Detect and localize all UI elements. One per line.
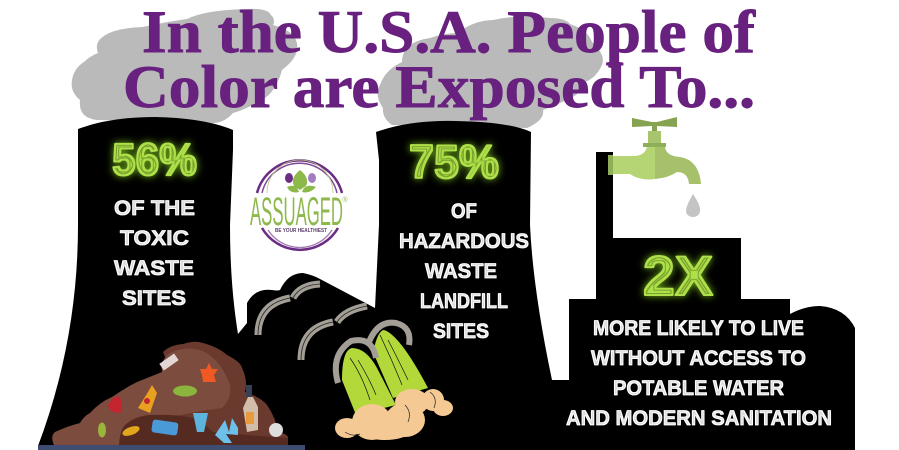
pipes: grey bands [258, 284, 367, 360]
text: of the toxic waste sites [114, 197, 195, 310]
waste pile [52, 342, 288, 445]
title: Color are Exposed To... [123, 54, 755, 120]
text: of the toxic waste sites: SITES [122, 287, 186, 310]
logo: Assuaged [250, 160, 348, 250]
stat: 2X: 2X [643, 244, 713, 307]
logo: Assuaged: BE YOUR HEALTHIEST [275, 228, 328, 234]
black industrial silhouette: towers, pipes and factory [38, 117, 855, 450]
icon: faucet and water drop [608, 117, 701, 217]
text: of the toxic waste sites: OF THE [114, 197, 195, 220]
text: of the toxic waste sites: WASTE [114, 257, 194, 280]
text: more likely to live without access: AND MODERN SANITATION [566, 407, 832, 430]
foam [335, 389, 453, 440]
stat: 75%: 75% [409, 135, 499, 188]
smoke cloud: middle tower [378, 16, 603, 128]
text: of hazardous waste landfill sites: HAZARDOUS [399, 230, 529, 253]
title: In the U.S.A. People of [142, 0, 756, 65]
pipes: outfall rings and green sludge [335, 323, 453, 440]
title [123, 0, 756, 120]
text: of the toxic waste sites: TOXIC [120, 227, 189, 250]
text: of hazardous waste landfill sites: WASTE [425, 260, 497, 283]
text: of hazardous waste landfill sites: SITES [433, 320, 489, 343]
text: more likely to live without access [566, 317, 832, 430]
smoke cloud: left tower [72, 9, 297, 123]
text: ASSUAGED [250, 190, 343, 234]
text: of hazardous waste landfill sites: OF [451, 200, 477, 223]
text: more likely to live without access: MORE LIKELY TO LIVE [593, 317, 804, 340]
text: more likely to live without access: WITHOUT ACCESS TO [591, 347, 806, 370]
logo: Assuaged: ® [342, 196, 348, 204]
text: more likely to live without access: POTABLE WATER [613, 377, 784, 400]
stat: 56%: 56% [112, 134, 197, 185]
text: of hazardous waste landfill sites [399, 200, 529, 343]
ground strip [38, 445, 305, 450]
text: of hazardous waste landfill sites: LANDFILL [420, 290, 508, 313]
